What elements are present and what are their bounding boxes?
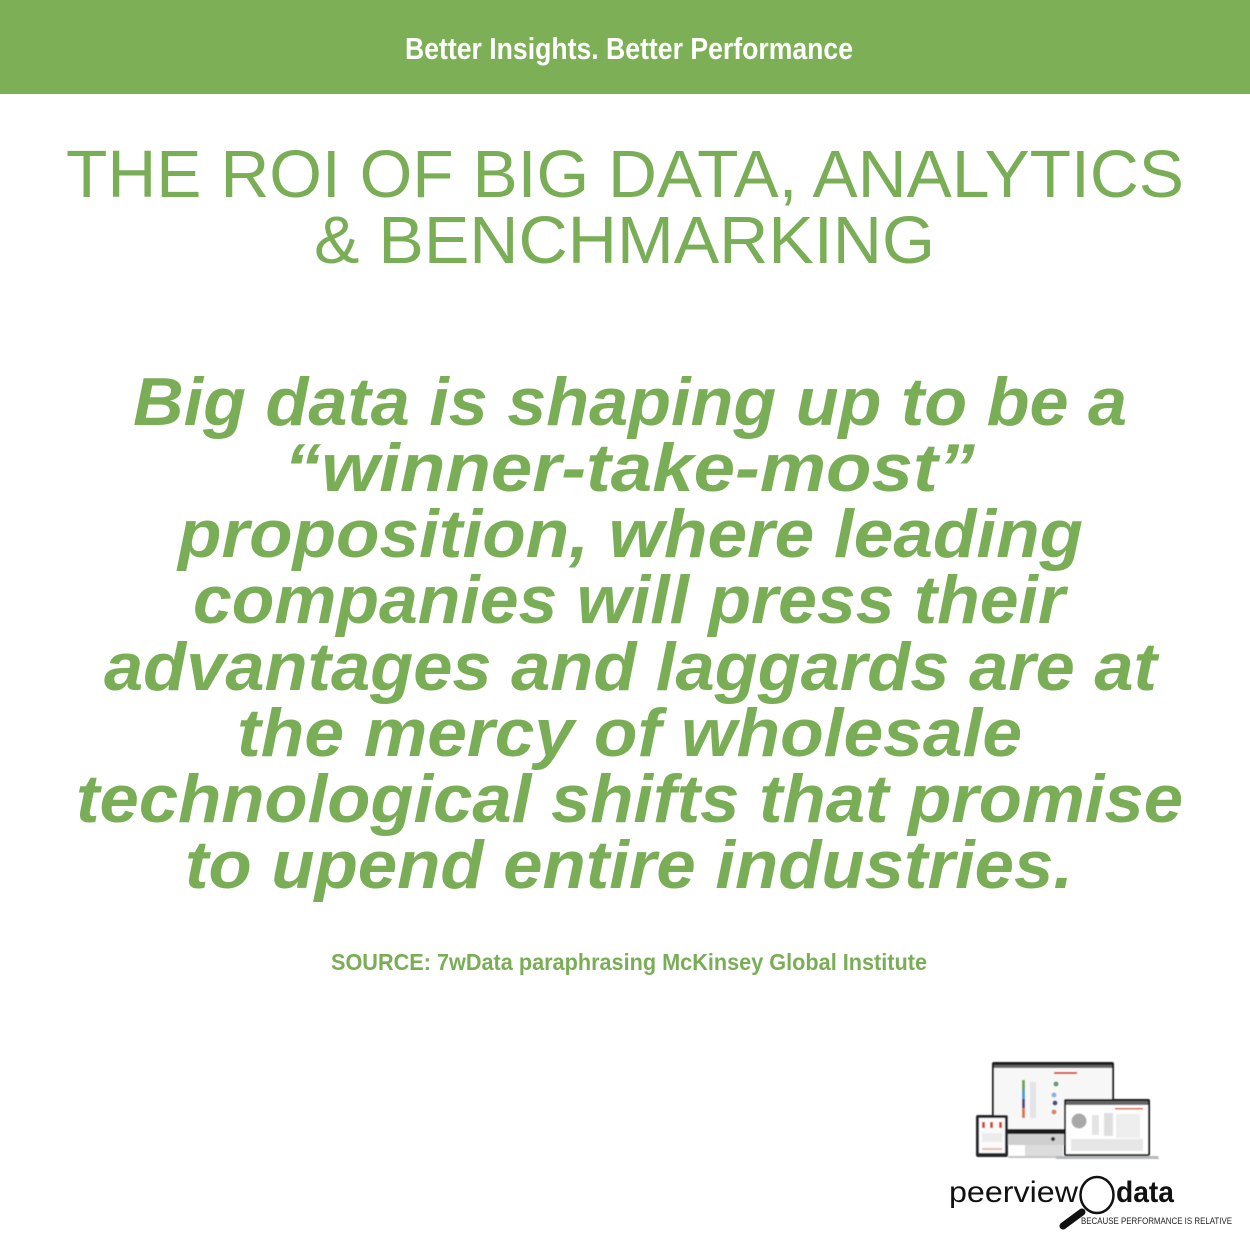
icon: tablet	[976, 1115, 1008, 1157]
logo: peerview data: peerview	[949, 1176, 1078, 1209]
quote text block: Big data is shaping up to be a	[133, 364, 1127, 440]
header banner: Better Insights. Better Performance	[405, 31, 853, 66]
icon: magnifying glass	[1063, 1177, 1114, 1226]
title	[66, 137, 1184, 278]
logo: peerview data: data	[1116, 1176, 1174, 1209]
logo: peerview data	[949, 1176, 1232, 1227]
title: & BENCHMARKING	[314, 203, 935, 278]
quote text block: the mercy of wholesale	[237, 695, 1022, 771]
icon: desktop monitor	[992, 1062, 1114, 1158]
title: THE ROI OF BIG DATA, ANALYTICS	[66, 137, 1184, 212]
header banner	[0, 0, 1250, 94]
quote text block: to upend entire industries.	[185, 827, 1073, 903]
quote text block: companies will press their	[193, 562, 1069, 638]
source line: SOURCE: 7wData paraphrasing McKinsey Global Institute	[331, 949, 927, 975]
quote text block: advantages and laggards are at	[104, 629, 1159, 705]
quote text block: proposition, where leading	[176, 496, 1083, 572]
icon: laptop	[1056, 1099, 1159, 1159]
device mockups	[976, 1062, 1159, 1159]
quote text block	[76, 364, 1183, 903]
quote text block: “winner-take-most”	[284, 430, 975, 506]
quote text block: technological shifts that promise	[76, 761, 1183, 837]
